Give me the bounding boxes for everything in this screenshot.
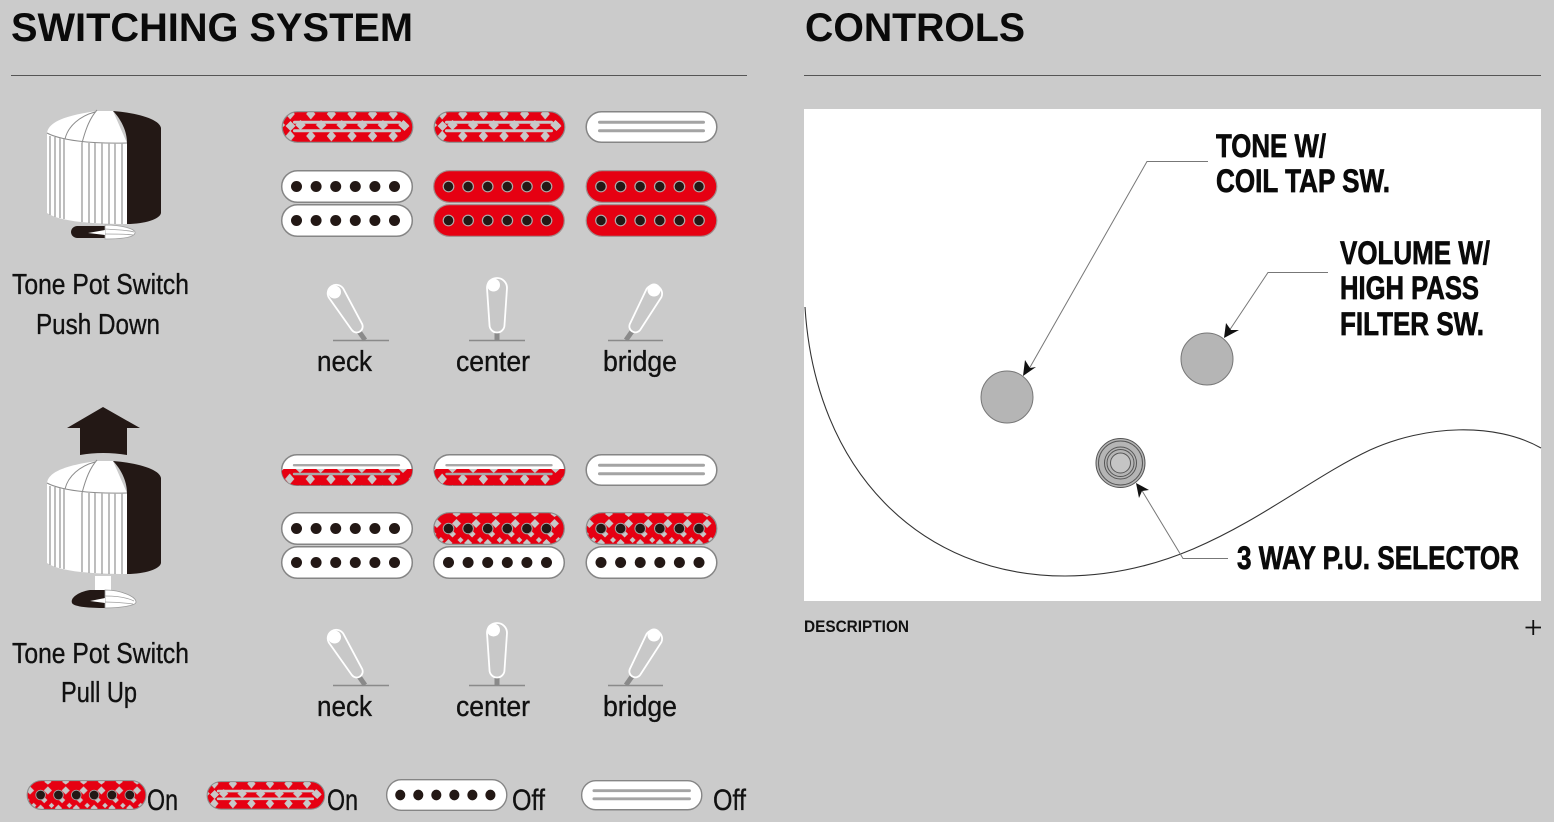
legend item: humbucker coil on: On (147, 784, 178, 817)
icon: tone knob pushed down (47, 110, 161, 239)
pickups: bridge position (586, 455, 717, 578)
label: tone pot switch pull up: Pull Up (61, 677, 137, 709)
legend item: single coil off (582, 781, 747, 817)
label: tone pot switch pull up (12, 638, 189, 709)
label: tone pot switch push down: Tone Pot Switch (12, 269, 189, 301)
label: volume with high pass filter switch: VOLUME W/ (1340, 235, 1490, 271)
icon: plus (1526, 620, 1541, 635)
label: volume with high pass filter switch: FILTER SW. (1340, 306, 1484, 342)
pickups: center position (434, 455, 565, 578)
legend item: humbucker coil on (27, 781, 178, 817)
legend item: humbucker coil off (387, 780, 546, 817)
heading: controls: CONTROLS (805, 6, 1025, 50)
arrow: tone leader (1023, 162, 1208, 376)
label: tone pot switch pull up: Tone Pot Switch (12, 638, 189, 670)
label: bridge: bridge (603, 691, 677, 723)
label: center: center (456, 691, 530, 723)
pickups: bridge position (586, 112, 717, 236)
label: center: center (456, 346, 530, 378)
legend item: single coil off: Off (713, 784, 747, 817)
pickups: neck position (282, 455, 412, 578)
label: neck: neck (317, 346, 372, 378)
heading: switching system: SWITCHING SYSTEM (11, 6, 413, 50)
knob: volume (1181, 333, 1233, 385)
legend item: single coil on: On (327, 784, 358, 817)
toggle: bridge (608, 284, 663, 340)
panel: pull up switching (12, 407, 717, 723)
description row: DESCRIPTION (804, 618, 909, 636)
label: tone with coil tap switch (1216, 128, 1390, 199)
label: volume with high pass filter switch: HIGH PASS (1340, 270, 1479, 306)
toggle: neck (328, 285, 389, 340)
toggle: neck (328, 630, 389, 686)
pickups: neck position (282, 112, 413, 236)
legend (27, 780, 747, 817)
panel: push down switching (12, 110, 717, 378)
selector: 3 way switch (1096, 438, 1145, 488)
pickups: center position (434, 112, 565, 236)
arrow: selector leader (1136, 483, 1228, 558)
panel: controls diagram (804, 109, 1541, 601)
label: bridge: bridge (603, 346, 677, 378)
label: neck: neck (317, 691, 372, 723)
guitar body outline (805, 307, 1541, 576)
icon: tone knob pulled up (47, 460, 161, 608)
label: tone pot switch push down (12, 269, 189, 341)
label: tone with coil tap switch: COIL TAP SW. (1216, 163, 1390, 199)
label: volume with high pass filter switch (1340, 235, 1490, 342)
toggle: bridge (608, 628, 663, 686)
toggle: center (469, 278, 525, 340)
arrow: volume leader (1224, 272, 1328, 338)
label: tone pot switch push down: Push Down (36, 309, 160, 341)
label: tone with coil tap switch: TONE W/ (1216, 128, 1326, 164)
legend item: single coil on (207, 782, 358, 817)
legend item: humbucker coil off: Off (512, 784, 546, 817)
icon: up arrow (67, 407, 140, 455)
toggle: center (469, 623, 525, 686)
knob: tone (981, 371, 1033, 423)
